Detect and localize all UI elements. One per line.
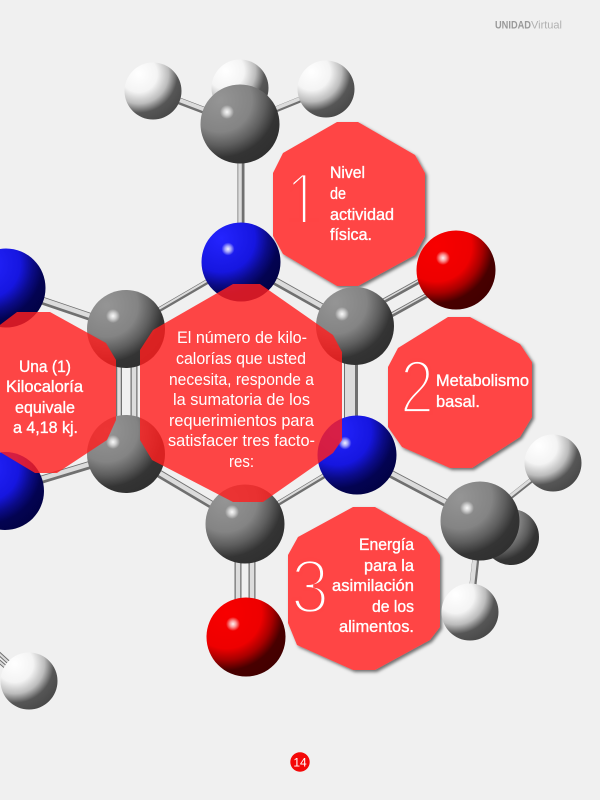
left text block: Una (1) <box>19 358 71 376</box>
central text block: necesita, responde a <box>169 371 315 389</box>
central text block: El número de kilo- <box>177 329 307 347</box>
carbon atom top <box>200 84 280 164</box>
page number badge <box>290 752 310 772</box>
numeral 3: 3 <box>291 546 329 630</box>
central text block <box>168 329 315 471</box>
carbon atom right <box>440 482 520 560</box>
factor 3 text: alimentos. <box>339 618 414 636</box>
carbon atom upper left <box>87 290 165 368</box>
carbon atom lower left <box>87 415 165 493</box>
hydrogen atom behind right <box>483 509 539 565</box>
left text block: a 4,18 kj. <box>13 419 78 437</box>
carbon atom bottom <box>206 484 284 564</box>
panel: factor 1 polygon <box>273 122 425 286</box>
central text block: requerimientos para <box>169 412 315 430</box>
central text block: res: <box>229 453 254 471</box>
factor 3 text: Energía <box>359 536 415 554</box>
factor 2 text <box>436 372 529 411</box>
numeral 2: 2 <box>400 345 434 430</box>
factor 3 text: de los <box>372 598 414 616</box>
factor 3 text: asimilación <box>332 577 414 595</box>
central text block: satisfacer tres facto- <box>168 432 315 450</box>
factor 1 text: Nivel <box>330 164 365 182</box>
central text block: la sumatoria de los <box>173 391 310 409</box>
molecule atoms <box>0 60 582 710</box>
molecule bonds <box>0 88 553 687</box>
factor 3 text: para la <box>364 557 415 575</box>
panel: kilocalorie equivalence polygon <box>0 312 116 473</box>
hydrogen atom top left <box>124 62 182 120</box>
nitrogen atom upper <box>202 222 280 302</box>
left text block: Kilocaloría <box>6 378 84 396</box>
factor 2 text: Metabolismo <box>436 372 529 390</box>
panel: central polygon <box>140 284 342 502</box>
hydrogen atom behind top <box>212 60 268 116</box>
factor 2 text: basal. <box>436 393 480 411</box>
carbon atom upper right <box>316 287 394 365</box>
hydrogen atom top right <box>298 60 354 118</box>
page number badge: 14 <box>293 756 307 770</box>
factor 1 text <box>330 164 394 244</box>
panel: factor 3 polygon <box>288 507 440 670</box>
nitrogen atom far left lower <box>0 452 44 530</box>
header logo: UNIDAD Virtual: UNIDADVirtual <box>495 20 562 32</box>
left text block <box>6 358 84 437</box>
factor 1 text: física. <box>330 226 372 244</box>
central text block: calorías que usted <box>176 350 306 368</box>
panel: factor 2 polygon <box>388 317 532 468</box>
factor 1 text: de <box>330 185 346 203</box>
nitrogen atom right <box>318 416 396 494</box>
hydrogen atom lower right <box>442 584 498 640</box>
oxygen atom upper right <box>416 230 496 310</box>
left text block: equivale <box>15 399 75 417</box>
hydrogen atom bottom left <box>0 652 58 710</box>
factor 3 text <box>332 536 415 636</box>
factor 1 text: actividad <box>330 206 394 224</box>
oxygen atom bottom <box>206 598 286 676</box>
numeral 1: 1 <box>286 158 320 243</box>
nitrogen atom far left upper <box>0 248 46 328</box>
hydrogen atom far right <box>524 434 582 492</box>
